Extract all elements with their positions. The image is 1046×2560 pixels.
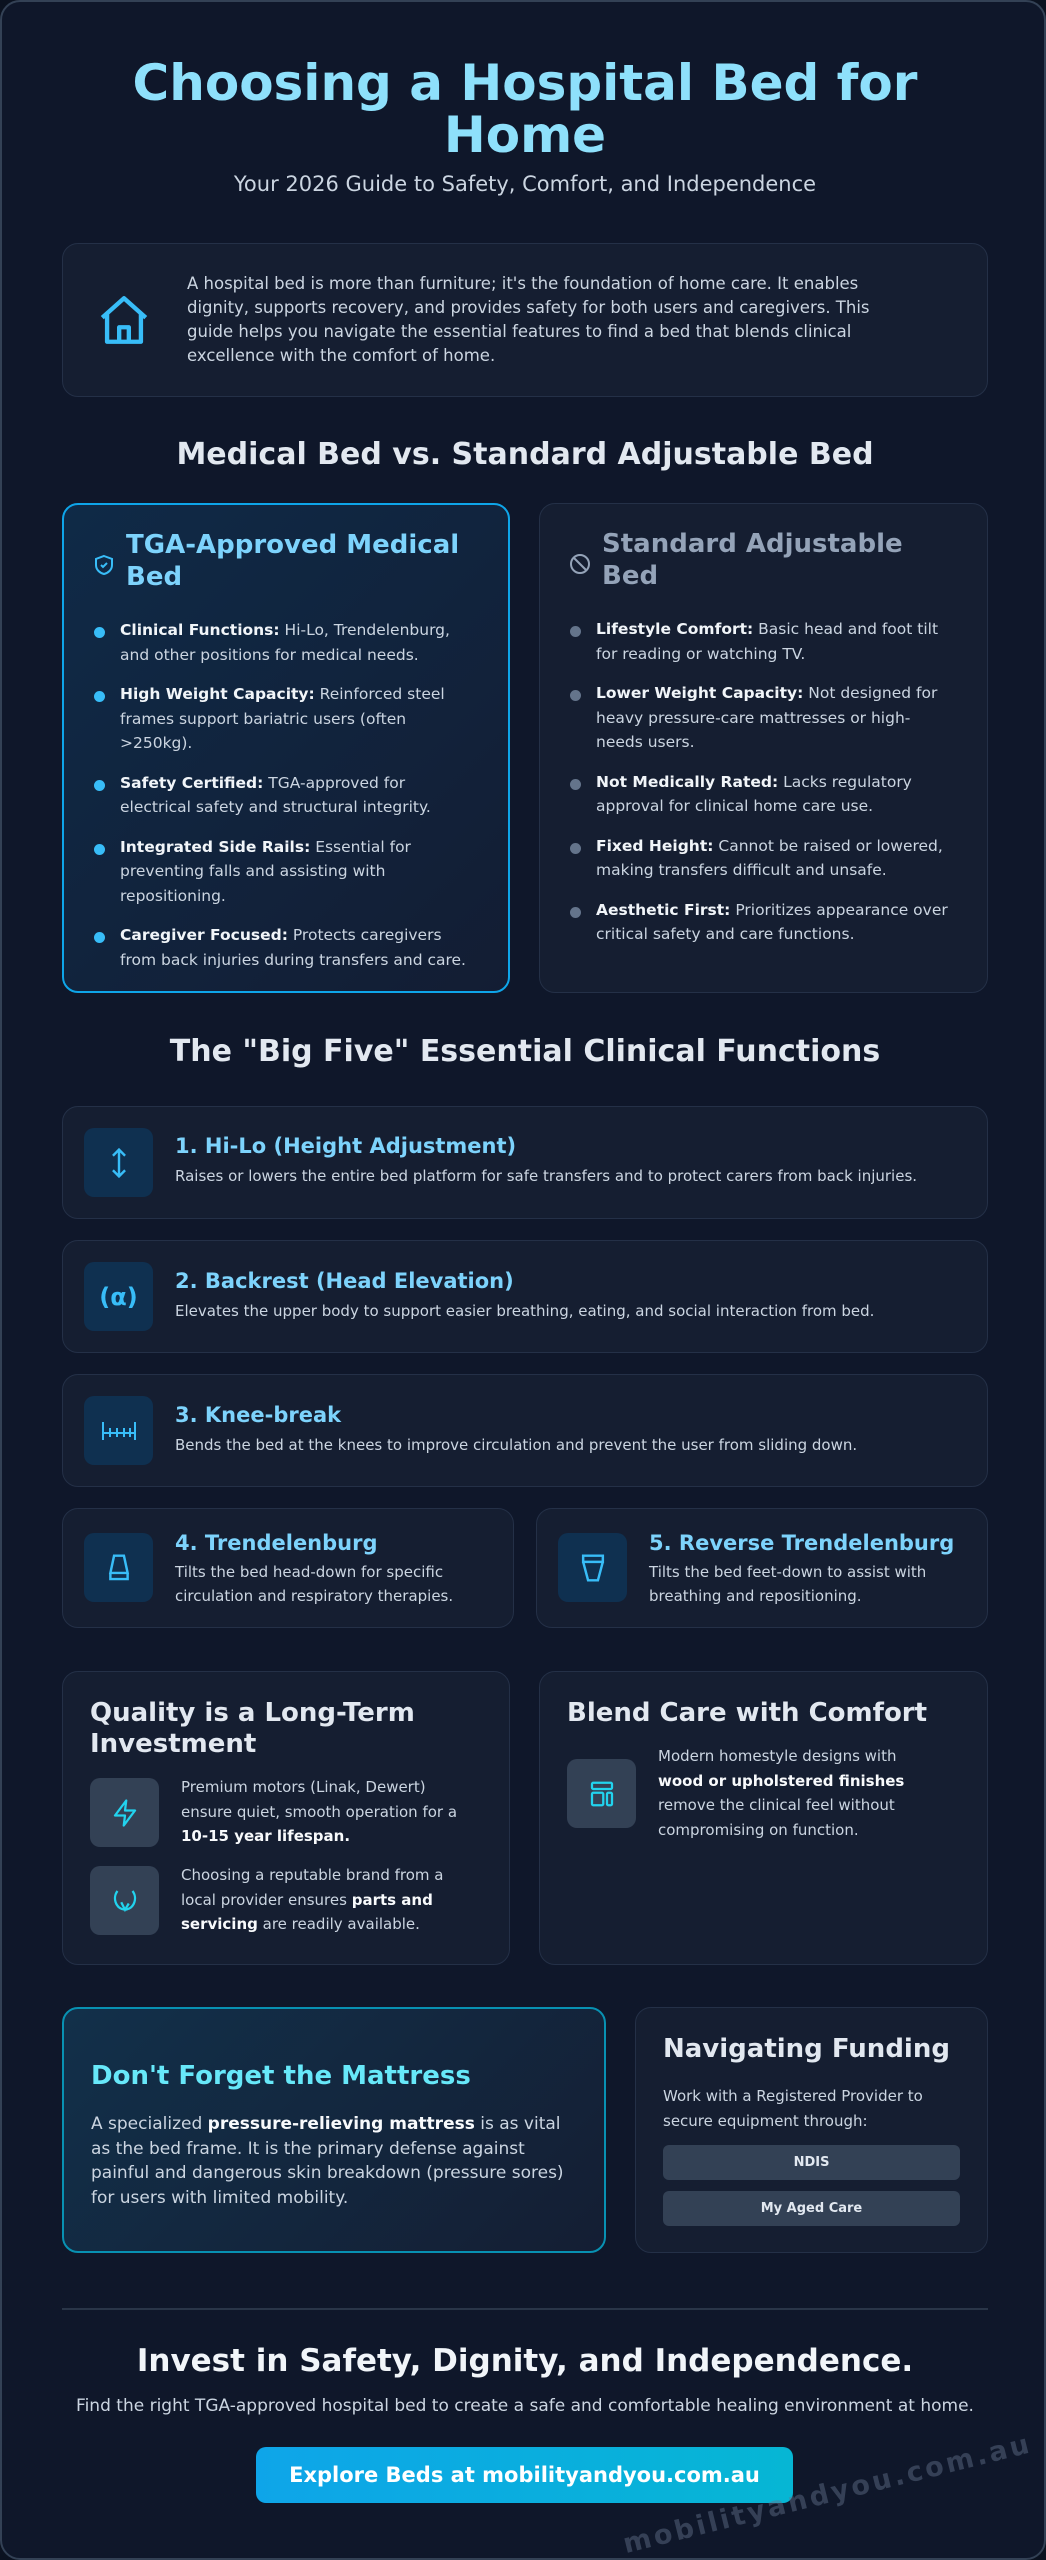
intro panel xyxy=(62,243,988,397)
function 2: Elevates the upper body to support easier breathing, eating, and social interaction from bed. xyxy=(175,1302,874,1320)
function 3: 3. Knee-break xyxy=(175,1403,341,1427)
card title: Bed xyxy=(602,561,658,591)
panel: medical bed xyxy=(62,503,510,993)
bullet list: Lifestyle Comfort: Basic head and foot tilt for reading or watching TV. xyxy=(596,620,938,662)
heading: Blend Care with Comfort xyxy=(567,1698,927,1728)
badge: My Aged Care: My Aged Care xyxy=(761,2201,862,2216)
closing heading: Invest in Safety, Dignity, and Independence. xyxy=(137,2343,913,2379)
text: A specialized pressure-relieving mattress is as vital as the bed frame. It is the primary defense against painful and dangerous skin breakdown (pressure sores) for users with limited mobility. xyxy=(91,2114,564,2208)
card title xyxy=(602,529,903,591)
icon: shield xyxy=(95,554,113,575)
card title: Bed xyxy=(126,562,182,592)
icon: knee-break xyxy=(84,1396,153,1465)
heading: comparison: Medical Bed vs. Standard Adjustable Bed xyxy=(176,437,874,472)
bullet list: from back injuries during transfers and care. xyxy=(120,950,466,968)
heading: Quality is a Long-Term xyxy=(90,1698,415,1728)
bullet list: Aesthetic First: Prioritizes appearance over critical safety and care functions. xyxy=(596,900,948,943)
function 5: Tilts the bed feet-down to assist with xyxy=(649,1563,926,1581)
subtitle: Your 2026 Guide to Safety, Comfort, and Independence xyxy=(234,172,816,196)
heading: Investment xyxy=(90,1729,256,1759)
text: servicing: Choosing a reputable brand from a local provider ensures parts and servicing are readily available. xyxy=(181,1866,443,1933)
icon: layout xyxy=(567,1759,636,1828)
bullet list xyxy=(94,621,466,968)
function 5: breathing and repositioning. xyxy=(649,1587,862,1605)
icon: up-down arrow xyxy=(84,1128,153,1197)
heading: Don't Forget the Mattress xyxy=(91,2061,471,2091)
bullet list xyxy=(570,620,948,943)
bullet list: Not Medically Rated: Lacks regulatory approval for clinical home care use. xyxy=(596,772,912,815)
card title: TGA-Approved Medical xyxy=(126,530,459,560)
icon: prohibited xyxy=(570,554,590,574)
function 1: Raises or lowers the entire bed platform for safe transfers and to protect carers from back injuries. xyxy=(175,1167,917,1185)
bullet list: Integrated Side Rails: Essential for preventing falls and assisting with repositioning. xyxy=(120,838,411,904)
icon: reverse trendelenburg xyxy=(558,1533,627,1602)
button: cta xyxy=(256,2447,793,2503)
badge: NDIS xyxy=(663,2145,960,2180)
function 4: circulation and respiratory therapies. xyxy=(175,1587,453,1605)
card title: Standard Adjustable xyxy=(602,529,903,559)
heading: big five: The "Big Five" Essential Clinical Functions xyxy=(170,1034,880,1069)
title: Home xyxy=(444,106,606,164)
panel: mattress xyxy=(62,2007,606,2253)
title: Choosing a Hospital Bed for xyxy=(133,54,917,112)
icon: lightning xyxy=(90,1778,159,1847)
icon: trendelenburg xyxy=(84,1533,153,1602)
function 3: Bends the bed at the knees to improve circulation and prevent the user from sliding down. xyxy=(175,1436,857,1454)
badge: NDIS: NDIS xyxy=(794,2155,829,2170)
panel: standard bed xyxy=(539,503,988,993)
bullet list: High Weight Capacity: Reinforced steel frames support bariatric users (often xyxy=(120,685,445,728)
title xyxy=(133,54,918,164)
icon: house xyxy=(100,296,148,344)
function 4 xyxy=(62,1508,514,1628)
function 1: 1. Hi-Lo (Height Adjustment) xyxy=(175,1134,516,1158)
bullet list: >250kg). xyxy=(120,734,192,752)
panel: funding xyxy=(635,2007,988,2253)
closing text: Find the right TGA-approved hospital bed to create a safe and comfortable healing environment at home. xyxy=(76,2396,974,2416)
text: Modern homestyle designs with wood or upholstered finishes remove the clinical feel without compromising on function. xyxy=(658,1747,904,1838)
icon: backrest xyxy=(84,1262,153,1331)
function 4: 4. Trendelenburg xyxy=(175,1531,378,1555)
heading xyxy=(90,1698,415,1759)
bullet list: Safety Certified: TGA-approved for xyxy=(120,774,405,792)
bullet list: Clinical Functions: Hi-Lo, Trendelenburg, and other positions for medical needs. xyxy=(120,621,450,664)
bullet list: electrical safety and structural integrity. xyxy=(120,798,431,816)
function 1 xyxy=(62,1106,988,1219)
function 5: 5. Reverse Trendelenburg xyxy=(649,1531,954,1555)
panel: blend care xyxy=(539,1671,988,1965)
function 2: 2. Backrest (Head Elevation) xyxy=(175,1269,514,1293)
panel: quality xyxy=(62,1671,510,1965)
bullet list: Caregiver Focused: Protects caregivers xyxy=(120,926,442,944)
function 4: Tilts the bed head-down for specific xyxy=(175,1563,443,1581)
badge: My Aged Care xyxy=(663,2191,960,2226)
watermark: mobilityandyou.com.au xyxy=(620,2428,1035,2560)
function 2 xyxy=(62,1240,988,1353)
intro text: A hospital bed is more than furniture; it's the foundation of home care. It enables dignity, supports recovery, and provides safety for both users and caregivers. This guide helps you navigate the essential features to find a bed that blends clinical excellence with the comfort of home. xyxy=(187,274,870,365)
bullet list: Fixed Height: Cannot be raised or lowered, making transfers difficult and unsafe. xyxy=(596,836,943,879)
heading: Navigating Funding xyxy=(663,2034,950,2064)
function 3 xyxy=(62,1374,988,1487)
icon: backrest: (α) xyxy=(99,1282,138,1310)
icon: service xyxy=(90,1866,159,1935)
text: Work with a Registered Provider to secure equipment through: xyxy=(663,2087,923,2130)
text: motors: Premium motors (Linak, Dewert) ensure quiet, smooth operation for a 10-15 year lifespan. xyxy=(181,1778,457,1845)
button: cta: Explore Beds at mobilityandyou.com.au xyxy=(289,2463,760,2487)
bullet list: Lower Weight Capacity: Not designed for heavy pressure-care mattresses or high-needs users. xyxy=(596,684,937,751)
function 5 xyxy=(536,1508,988,1628)
card title xyxy=(126,530,459,592)
